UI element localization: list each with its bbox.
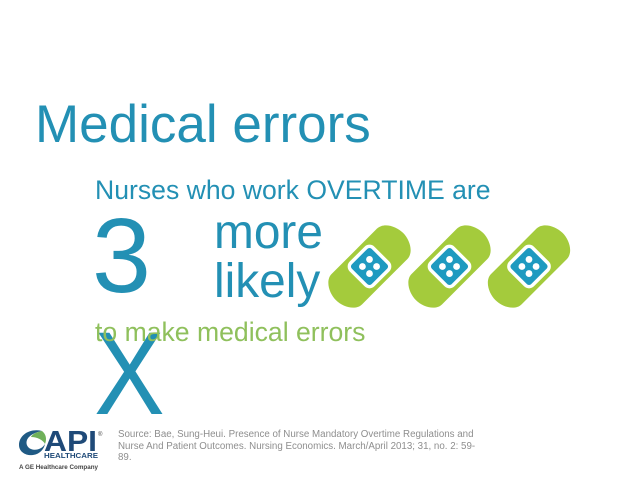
- logo: API Healthcare: [19, 426, 103, 471]
- source citation: 89.: [118, 452, 132, 463]
- icon: bandage 2: [401, 218, 498, 315]
- logo wordmark: API: [44, 426, 97, 458]
- title: Medical errors: [35, 95, 371, 154]
- logo tagline: A GE Healthcare Company: [19, 465, 99, 471]
- big number 3: 3: [92, 197, 151, 315]
- subheading: Nurses who work OVERTIME are: [95, 175, 491, 205]
- logo subtitle: HEALTHCARE: [44, 451, 98, 460]
- source citation: Nurse And Patient Outcomes. Nursing Economics. March/April 2013; 31, no. 2: 59-: [118, 441, 475, 452]
- green caption: to make medical errors: [95, 317, 365, 347]
- source citation: [118, 429, 475, 463]
- more likely text: likely: [214, 255, 320, 308]
- icon: bandage 3: [480, 218, 578, 315]
- icon: bandage 1: [321, 218, 418, 315]
- more likely text: more: [214, 206, 323, 259]
- logo swirl: [19, 430, 46, 455]
- more likely text: [214, 206, 323, 308]
- source citation: Source: Bae, Sung-Heui. Presence of Nurse Mandatory Overtime Regulations and: [118, 429, 474, 440]
- big multiplier X: X: [94, 308, 165, 439]
- logo registered mark: ®: [98, 431, 103, 438]
